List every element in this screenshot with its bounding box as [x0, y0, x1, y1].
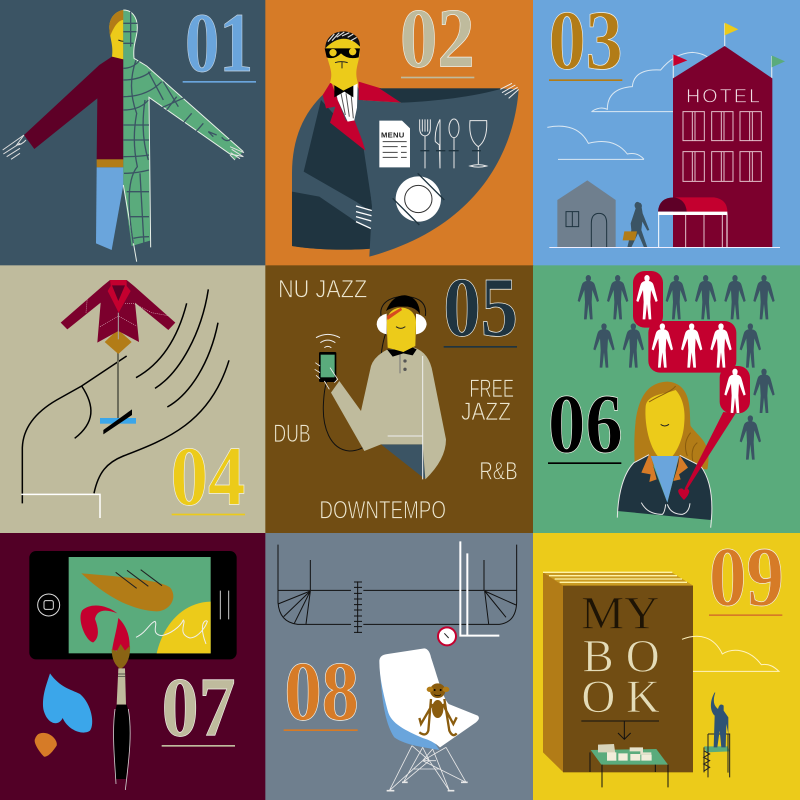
ground line [549, 247, 780, 248]
genre words: NU JAZZ [278, 277, 367, 304]
genre words [273, 277, 518, 525]
number 09: 09 [709, 530, 784, 624]
wooden monkey [419, 683, 457, 735]
panel 01: half man half pattern [0, 0, 268, 268]
hotel building: HOTEL [686, 85, 760, 107]
panel 08: floor plan and chair [265, 533, 534, 800]
underline 08 [284, 729, 358, 731]
awning [658, 197, 727, 247]
genre words: DUB [273, 421, 311, 448]
body [331, 346, 446, 479]
woman hair [634, 382, 709, 469]
underline 07 [162, 745, 235, 747]
house [557, 180, 616, 247]
book: MY [581, 587, 659, 639]
hotel building [673, 46, 772, 247]
panel 09: giant book [533, 530, 800, 800]
cape [354, 83, 519, 257]
paintbrush [112, 618, 130, 790]
cuff [21, 494, 100, 518]
cutlery icons [420, 119, 487, 168]
head and headphones [377, 295, 427, 352]
selected people [636, 275, 746, 413]
number 08: 08 [284, 644, 359, 738]
panel 04: hand with jacket puppet [0, 265, 268, 534]
underline 06 [548, 462, 621, 464]
painted shapes [80, 570, 211, 653]
panel 06: woman selecting people [533, 265, 800, 534]
number 07: 07 [162, 660, 236, 754]
book: BO [582, 630, 660, 682]
underline 01 [183, 81, 256, 83]
panel 03: hotel street [533, 0, 800, 268]
underline 03 [549, 79, 622, 81]
hand outline [22, 289, 229, 503]
puppet stick [100, 339, 136, 434]
blue blob [43, 673, 92, 733]
genre words: DOWNTEMPO [319, 498, 446, 525]
speech spike [685, 412, 736, 490]
phone [315, 334, 340, 389]
number 04: 04 [171, 429, 245, 523]
cable [323, 296, 426, 451]
jacket [61, 280, 175, 354]
underline 05 [444, 346, 517, 348]
chair [379, 648, 479, 791]
panel 05: listener with headphones [265, 261, 534, 534]
white walls [460, 541, 499, 636]
panel 07: phone painting [0, 533, 268, 800]
flags [673, 23, 785, 78]
genre words: FREE [469, 376, 514, 403]
genre words: R&B [479, 458, 518, 485]
floor plan [278, 545, 517, 633]
orange blob [35, 733, 57, 757]
underline 02 [401, 77, 474, 78]
woman [617, 386, 712, 528]
walking person [623, 202, 649, 247]
plate [393, 173, 444, 225]
underline 04 [172, 514, 245, 515]
number 05: 05 [443, 261, 518, 355]
panel 02: waiter with cape menu [265, 0, 534, 268]
number 06: 06 [548, 377, 623, 471]
person on stool [704, 692, 730, 777]
underline 09 [709, 614, 782, 616]
smartphone [29, 551, 237, 659]
figure: dressed half [3, 10, 132, 250]
menu card [379, 121, 410, 167]
red selection path [633, 271, 750, 413]
heart [678, 488, 689, 500]
book [543, 572, 693, 772]
clouds [547, 52, 709, 159]
wall clock [438, 627, 456, 645]
book: OK [581, 671, 660, 723]
waiter body [292, 82, 401, 250]
crowd [578, 275, 775, 460]
menu card: MENU [381, 130, 405, 139]
table with books [590, 744, 668, 787]
figure: patterned half [123, 10, 244, 262]
waiter head with mask [325, 31, 360, 91]
genre words: JAZZ [461, 399, 511, 426]
cloud [682, 636, 779, 671]
